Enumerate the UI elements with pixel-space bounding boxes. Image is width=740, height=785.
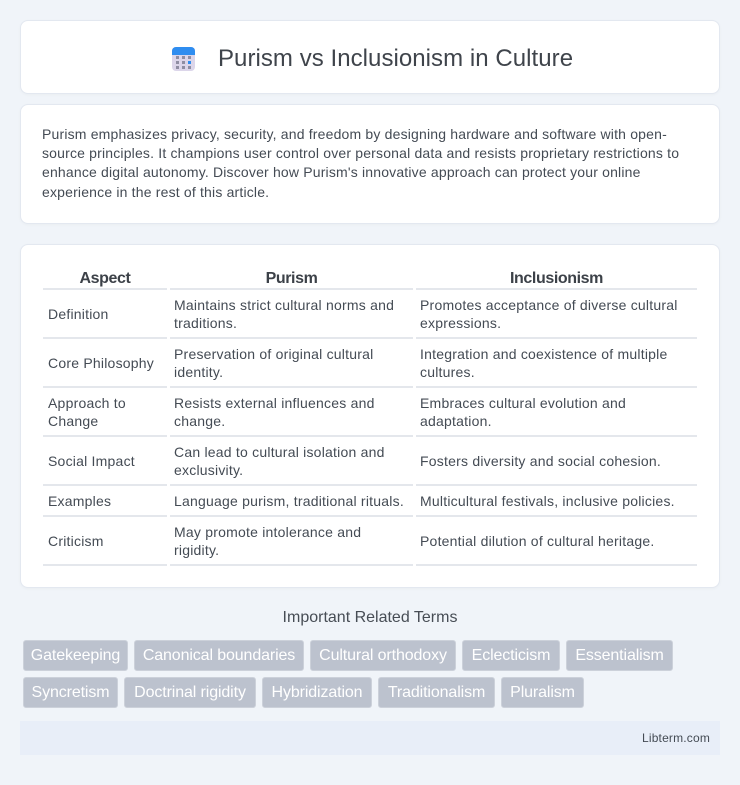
Approach to Change: Inclusionism: [420, 395, 626, 429]
comparison table panel: [20, 244, 720, 588]
tag: Cultural orthodoxy: [310, 640, 456, 671]
intro text: source principles. It champions user control over personal data and resists proprietary restrictions to: [42, 145, 679, 161]
tag: Syncretism: [23, 677, 118, 708]
tag: Gatekeeping: Gatekeeping: [31, 647, 120, 664]
Criticism: Purism: [174, 524, 361, 558]
tag: Syncretism: Syncretism: [32, 684, 109, 701]
column header: Purism: Purism: [266, 270, 317, 287]
Approach to Change: Purism: Resists external influences and: [174, 395, 375, 411]
intro text: Purism emphasizes privacy, security, and freedom by designing hardware and software with open-: [42, 126, 667, 142]
tag: Hybridization: Hybridization: [272, 684, 362, 701]
Social Impact: Purism: Can lead to cultural isolation and: [174, 444, 385, 460]
Definition: Purism: [174, 297, 394, 331]
footer credit: Libterm.com: [642, 731, 710, 745]
Core Philosophy: Purism: identity.: [174, 364, 223, 380]
Social Impact: Inclusionism: Fosters diversity and social cohesion.: [420, 453, 661, 469]
column header: Aspect: Aspect: [80, 270, 130, 287]
column header: Inclusionism: Inclusionism: [510, 270, 603, 287]
tag: Doctrinal rigidity: Doctrinal rigidity: [134, 684, 246, 701]
Criticism: Purism: rigidity.: [174, 542, 219, 558]
tag: Hybridization: [262, 677, 372, 708]
row: Approach to Change: [48, 395, 126, 429]
Approach to Change: Inclusionism: adaptation.: [420, 413, 492, 429]
row: Approach to Change: Change: [48, 413, 98, 429]
Definition: Inclusionism: [420, 297, 678, 331]
Social Impact: Purism: [174, 444, 385, 478]
Core Philosophy: Inclusionism: cultures.: [420, 364, 475, 380]
tag: Canonical boundaries: [134, 640, 304, 671]
Criticism: Purism: May promote intolerance and: [174, 524, 361, 540]
Core Philosophy: Purism: [174, 346, 373, 380]
Examples: Inclusionism: Multicultural festivals, inclusive policies.: [420, 493, 675, 509]
Approach to Change: Purism: change.: [174, 413, 225, 429]
tag: Traditionalism: Traditionalism: [388, 684, 485, 701]
Core Philosophy: Inclusionism: [420, 346, 668, 380]
Approach to Change: Purism: [174, 395, 375, 429]
tag: Essentialism: Essentialism: [575, 647, 664, 664]
tag: Doctrinal rigidity: [124, 677, 256, 708]
tag: Essentialism: [566, 640, 673, 671]
Definition: Inclusionism: Promotes acceptance of diverse cultural: [420, 297, 678, 313]
tag: Eclecticism: [462, 640, 560, 671]
Examples: Purism: Language purism, traditional rituals.: [174, 493, 404, 509]
related terms heading: Important Related Terms: [283, 609, 457, 626]
tag: Eclecticism: Eclecticism: [472, 647, 550, 664]
intro text: enhance digital autonomy. Discover how Purism's innovative approach can protect your online: [42, 164, 641, 180]
row: Criticism: Criticism: [48, 533, 104, 549]
Approach to Change: Inclusionism: Embraces cultural evolution and: [420, 395, 626, 411]
footer bar: [20, 721, 720, 755]
header panel: [20, 20, 720, 94]
Criticism: Inclusionism: Potential dilution of cultural heritage.: [420, 533, 654, 549]
tag: Pluralism: Pluralism: [510, 684, 575, 701]
intro text: experience in the rest of this article.: [42, 184, 269, 200]
intro panel: [20, 104, 720, 224]
row: Definition: Definition: [48, 306, 109, 322]
title: Purism vs Inclusionism in Culture: [218, 45, 573, 72]
Definition: Purism: Maintains strict cultural norms and: [174, 297, 394, 313]
row: Core Philosophy: Core Philosophy: [48, 355, 154, 371]
tag: Pluralism: [501, 677, 584, 708]
Core Philosophy: Inclusionism: Integration and coexistence of multiple: [420, 346, 668, 362]
Definition: Purism: traditions.: [174, 315, 237, 331]
tag: Canonical boundaries: Canonical boundaries: [143, 647, 295, 664]
Core Philosophy: Purism: Preservation of original cultural: [174, 346, 373, 362]
row: Examples: Examples: [48, 493, 111, 509]
icon: calendar: [172, 47, 195, 71]
row: Social Impact: Social Impact: [48, 453, 135, 469]
tag: Traditionalism: [378, 677, 495, 708]
Definition: Inclusionism: expressions.: [420, 315, 501, 331]
intro text: [42, 126, 679, 200]
tag: Gatekeeping: [23, 640, 128, 671]
row: Approach to Change: Approach to: [48, 395, 126, 411]
Social Impact: Purism: exclusivity.: [174, 462, 243, 478]
tag: Cultural orthodoxy: Cultural orthodoxy: [319, 647, 447, 664]
